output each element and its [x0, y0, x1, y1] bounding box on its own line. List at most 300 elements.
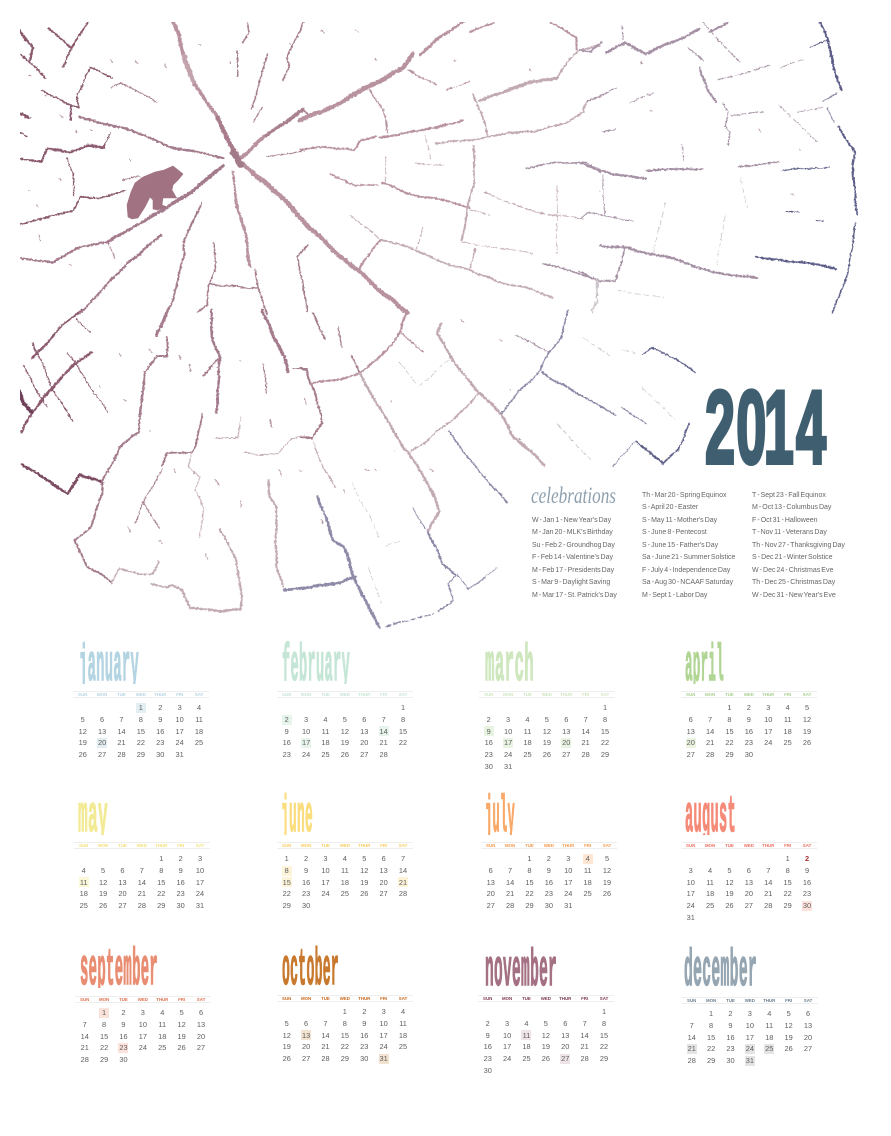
- day grid: 28: [117, 750, 126, 759]
- day grid: 22: [600, 1042, 608, 1051]
- day grid: 14: [117, 727, 126, 736]
- panel: may: [74, 791, 210, 910]
- weekday header: SAT: [600, 996, 608, 1001]
- day grid: 8: [343, 1019, 347, 1028]
- day grid: 24: [302, 750, 310, 759]
- day grid: 3: [198, 854, 202, 863]
- day grid: 25: [523, 750, 532, 759]
- day grid: 26: [803, 738, 811, 747]
- day grid: 9: [362, 1019, 366, 1028]
- day grid: 14: [321, 1031, 330, 1040]
- day grid: 6: [747, 866, 751, 875]
- day grid: 6: [806, 1009, 810, 1018]
- day grid: [484, 703, 609, 771]
- day grid: [79, 703, 203, 759]
- day grid: 9: [747, 715, 751, 724]
- day grid: 10: [764, 715, 772, 724]
- weekday header: TUE: [523, 692, 532, 697]
- day grid: 15: [137, 727, 145, 736]
- day grid: 4: [708, 866, 712, 875]
- day grid: 6: [304, 1019, 308, 1028]
- weekday header: FRI: [380, 692, 387, 697]
- day grid: 21: [688, 1044, 696, 1053]
- day grid: 20: [687, 738, 695, 747]
- day grid: 2: [805, 854, 809, 863]
- day grid: [283, 1007, 407, 1064]
- day grid: 20: [745, 889, 753, 898]
- weekday header: TUE: [725, 692, 734, 697]
- weekday header: THUR: [358, 692, 370, 697]
- day grid: 3: [323, 854, 328, 863]
- day grid: 29: [600, 1054, 608, 1063]
- day grid: 22: [707, 1044, 715, 1053]
- day grid: 30: [726, 1056, 735, 1065]
- weekday header: [277, 995, 413, 1002]
- day grid: 4: [323, 715, 328, 724]
- celebrations list: column three: Th - Dec 25 - Christmas Day: [752, 579, 835, 586]
- day grid: 30: [177, 901, 185, 910]
- day grid: 21: [581, 1042, 589, 1051]
- day grid: 6: [120, 866, 125, 875]
- weekday header: THUR: [358, 996, 370, 1001]
- day grid: 30: [545, 901, 553, 910]
- celebrations list: column three: T - Sept 23 - Fall Equinox: [752, 492, 826, 499]
- weekday header: SAT: [399, 996, 407, 1001]
- day grid: 3: [505, 1019, 509, 1028]
- day grid: 26: [341, 750, 349, 759]
- day grid: 2: [179, 854, 183, 863]
- weekday header: SAT: [399, 692, 407, 697]
- day grid: 13: [197, 1020, 205, 1029]
- weekday header: SAT: [803, 843, 811, 848]
- day grid: 14: [581, 1031, 589, 1040]
- weekday header: FRI: [380, 996, 387, 1001]
- day grid: 31: [746, 1056, 754, 1065]
- weekday header: WED: [340, 692, 350, 697]
- day grid: 24: [746, 1044, 754, 1053]
- day grid: 11: [322, 727, 329, 736]
- celebrations list: column two: S - May 11 - Mother's Day: [642, 517, 717, 524]
- celebrations list: column three: T - Nov 11 - Veterans Day: [752, 529, 827, 536]
- day grid: 2: [121, 1008, 126, 1017]
- year: 2014: 2014: [705, 369, 826, 486]
- day grid: [282, 703, 407, 759]
- day grid: 13: [562, 727, 570, 736]
- day grid: 27: [302, 1054, 310, 1063]
- day grid: 4: [767, 1009, 771, 1018]
- weekday header: [277, 842, 413, 849]
- weekday header: FRI: [784, 843, 791, 848]
- day grid: 7: [690, 1021, 694, 1030]
- day grid: 8: [527, 866, 532, 875]
- day grid: 20: [562, 738, 570, 747]
- day grid: 13: [118, 878, 127, 887]
- day grid: 22: [784, 889, 792, 898]
- day grid: 17: [139, 1032, 147, 1041]
- day grid: 7: [766, 866, 770, 875]
- weekday header: THUR: [156, 997, 168, 1002]
- day grid: 9: [728, 1021, 733, 1030]
- panel: april: [681, 640, 817, 759]
- day grid: 17: [503, 1042, 511, 1051]
- day grid: 3: [748, 1009, 752, 1018]
- weekday header: SAT: [803, 692, 811, 697]
- day grid: [687, 1009, 812, 1066]
- weekday header: WED: [744, 692, 754, 697]
- day grid: 16: [119, 1032, 128, 1041]
- weekday header: MON: [705, 692, 715, 697]
- day grid: 3: [566, 854, 570, 863]
- day grid: 7: [119, 715, 124, 724]
- day grid: 27: [687, 750, 695, 759]
- celebrations list: column three: M - Oct 13 - Columbus Day: [752, 504, 831, 511]
- day grid: 23: [360, 1042, 368, 1051]
- day grid: 27: [197, 1043, 205, 1052]
- day grid: 25: [341, 889, 349, 898]
- day grid: 1: [401, 703, 405, 712]
- day grid: 17: [764, 727, 772, 736]
- day grid: 24: [564, 889, 572, 898]
- day grid: 25: [765, 1044, 773, 1053]
- day grid: 16: [485, 738, 493, 747]
- day grid: 13: [302, 1031, 310, 1040]
- day grid: 7: [323, 1019, 328, 1028]
- celebrations list: column two: F - July 4 - Independence Day: [642, 567, 730, 574]
- day grid: 5: [101, 866, 105, 875]
- day grid: 5: [285, 1019, 289, 1028]
- day grid: 16: [484, 1042, 492, 1051]
- day grid: 2: [304, 854, 308, 863]
- weekday header: TUE: [119, 997, 128, 1002]
- day grid: 24: [764, 738, 772, 747]
- day grid: 16: [803, 878, 811, 887]
- day grid: 18: [522, 1042, 531, 1051]
- day grid: 10: [503, 1031, 511, 1040]
- weekday header: THUR: [763, 998, 775, 1003]
- day grid: [484, 1007, 608, 1075]
- weekday header: WED: [340, 996, 350, 1001]
- day grid: 8: [139, 715, 143, 724]
- celebrations list: column one: F - Feb 14 - Valentine's Day: [532, 554, 613, 561]
- day grid: 20: [804, 1033, 812, 1042]
- day grid: 21: [117, 738, 126, 747]
- day grid: 16: [302, 878, 310, 887]
- weekday header: MON: [502, 996, 512, 1001]
- day grid: 21: [380, 738, 388, 747]
- weekday header: THUR: [560, 692, 572, 697]
- day grid: 9: [487, 727, 491, 736]
- day grid: 18: [195, 727, 203, 736]
- day grid: 11: [765, 1021, 773, 1030]
- day grid: 19: [603, 878, 611, 887]
- day grid: 2: [486, 1019, 490, 1028]
- cracks: radial and ring lines: [20, 22, 857, 627]
- day grid: 16: [177, 878, 185, 887]
- day grid: 26: [785, 1044, 793, 1053]
- day grid: 15: [525, 878, 534, 887]
- day grid: 18: [341, 878, 349, 887]
- day grid: 9: [285, 727, 289, 736]
- day grid: 28: [138, 901, 146, 910]
- day grid: 23: [745, 738, 753, 747]
- day grid: 15: [725, 727, 734, 736]
- weekday header: MON: [505, 843, 515, 848]
- day grid: 28: [582, 750, 590, 759]
- celebrations list: column three: W - Dec 24 - Christmas Eve: [752, 567, 833, 574]
- celebrations list: column two: M - Sept 1 - Labor Day: [642, 592, 707, 599]
- weekday header: TUE: [725, 843, 734, 848]
- day grid: 21: [81, 1043, 89, 1052]
- day grid: 16: [545, 878, 553, 887]
- weekday header: [681, 842, 817, 849]
- day grid: 1: [603, 703, 607, 712]
- day grid: 7: [83, 1020, 87, 1029]
- day grid: 31: [504, 762, 512, 771]
- day grid: [81, 1008, 205, 1064]
- day grid: 25: [80, 901, 88, 910]
- day grid: 26: [283, 1054, 291, 1063]
- day grid: 10: [196, 866, 204, 875]
- day grid: 23: [119, 1043, 128, 1052]
- day grid: 5: [362, 854, 366, 863]
- weekday header: SAT: [601, 692, 609, 697]
- day grid: 3: [141, 1008, 145, 1017]
- celebrations list: column one: S - Mar 9 - Daylight Saving: [532, 579, 610, 586]
- weekday header: MON: [503, 692, 513, 697]
- day grid: 8: [603, 715, 607, 724]
- celebrations list: column three: [752, 492, 845, 599]
- day grid: 9: [805, 866, 809, 875]
- day grid: 20: [118, 889, 127, 898]
- weekday header: MON: [98, 843, 108, 848]
- day grid: 29: [100, 1055, 108, 1064]
- tree ring crack artwork with bear: [20, 22, 858, 629]
- day grid: 13: [380, 866, 388, 875]
- day grid: 10: [176, 715, 184, 724]
- day grid: 8: [786, 866, 790, 875]
- day grid: 21: [706, 738, 714, 747]
- day grid: 8: [102, 1020, 106, 1029]
- day grid: 3: [506, 715, 510, 724]
- weekday header: SAT: [804, 998, 812, 1003]
- day grid: 31: [380, 1054, 388, 1063]
- day grid: 16: [726, 1033, 735, 1042]
- day grid: 13: [561, 1031, 569, 1040]
- weekday header: THUR: [562, 843, 574, 848]
- panel: february: [277, 640, 413, 759]
- day grid: 30: [156, 750, 164, 759]
- day grid: 14: [706, 727, 714, 736]
- day grid: 12: [785, 1021, 793, 1030]
- weekday header: WED: [745, 998, 755, 1003]
- celebrations list: column one: M - Jan 20 - MLK's Birthday: [532, 529, 613, 536]
- day grid: 9: [304, 866, 308, 875]
- day grid: 2: [747, 703, 751, 712]
- day grid: 7: [508, 866, 512, 875]
- day grid: 20: [487, 889, 495, 898]
- weekday header: FRI: [784, 692, 791, 697]
- day grid: 5: [544, 1019, 548, 1028]
- day grid: 21: [321, 1042, 330, 1051]
- day grid: 14: [764, 878, 772, 887]
- celebrations list: column one: [532, 517, 617, 599]
- day grid: 18: [523, 738, 532, 747]
- day grid: 1: [159, 854, 163, 863]
- day grid: 21: [399, 878, 407, 887]
- day grid: 19: [542, 1042, 550, 1051]
- celebrations list: column two: Sa - Aug 30 - NCAAF Saturday: [642, 579, 733, 586]
- celebrations list: column one: Su - Feb 2 - Groundhog Day: [532, 542, 615, 549]
- day grid: 23: [485, 750, 493, 759]
- panel: july: [481, 791, 617, 910]
- day grid: 25: [522, 1054, 531, 1063]
- weekday header: FRI: [380, 843, 387, 848]
- day grid: 22: [341, 1042, 349, 1051]
- day grid: 13: [687, 727, 695, 736]
- day grid: 25: [584, 889, 592, 898]
- day grid: 2: [547, 854, 551, 863]
- day grid: 2: [728, 1009, 733, 1018]
- day grid: 30: [119, 1055, 128, 1064]
- day grid: 11: [399, 1019, 407, 1028]
- weekday header: [73, 691, 209, 698]
- panel: june: [277, 791, 413, 910]
- day grid: 5: [343, 715, 347, 724]
- weekday header: TUE: [321, 843, 330, 848]
- day grid: 15: [157, 878, 165, 887]
- day grid: 18: [321, 738, 330, 747]
- day grid: 5: [545, 715, 549, 724]
- weekday header: THUR: [358, 843, 370, 848]
- day grid: 29: [601, 750, 609, 759]
- day grid: [686, 854, 812, 922]
- weekday header: SUN: [686, 692, 695, 697]
- weekday header: TUE: [118, 843, 127, 848]
- day grid: 18: [784, 727, 792, 736]
- day grid: 12: [603, 866, 611, 875]
- day grid: 5: [805, 703, 809, 712]
- day grid: 4: [401, 1007, 405, 1016]
- day grid: 3: [689, 866, 693, 875]
- day grid: 22: [137, 738, 145, 747]
- day grid: 19: [725, 889, 734, 898]
- weekday header: MON: [301, 843, 311, 848]
- day grid: 11: [158, 1020, 166, 1029]
- celebrations list: column three: Th - Nov 27 - Thanksgiving Day: [752, 542, 845, 549]
- day grid: 4: [197, 703, 201, 712]
- weekday header: TUE: [726, 998, 735, 1003]
- weekday header: TUE: [525, 843, 534, 848]
- weekday header: FRI: [584, 843, 591, 848]
- panel: january: [73, 640, 209, 759]
- day grid: 8: [727, 715, 732, 724]
- day grid: 24: [687, 901, 695, 910]
- day grid: 26: [79, 750, 87, 759]
- day grid: 23: [156, 738, 164, 747]
- day grid: 23: [545, 889, 553, 898]
- day grid: 30: [803, 901, 811, 910]
- day grid: 19: [785, 1033, 793, 1042]
- day grid: 18: [765, 1033, 773, 1042]
- day grid: 10: [746, 1021, 754, 1030]
- weekday header: MON: [301, 996, 311, 1001]
- weekday header: THUR: [762, 692, 774, 697]
- weekday header: WED: [137, 843, 147, 848]
- weekday header: [478, 995, 614, 1002]
- day grid: 6: [199, 1008, 203, 1017]
- weekday header: SUN: [282, 996, 291, 1001]
- day grid: 19: [178, 1032, 186, 1041]
- day grid: [282, 854, 408, 910]
- weekday header: SUN: [687, 998, 696, 1003]
- day grid: 25: [158, 1043, 166, 1052]
- celebrations list: column three: S - Dec 21 - Winter Solstice: [752, 554, 833, 561]
- weekday header: [277, 691, 413, 698]
- day grid: 22: [100, 1043, 108, 1052]
- day grid: 7: [708, 715, 712, 724]
- day grid: 31: [564, 901, 572, 910]
- day grid: 7: [583, 1019, 587, 1028]
- day grid: 26: [178, 1043, 186, 1052]
- day grid: 12: [542, 1031, 550, 1040]
- day grid: 19: [283, 1042, 291, 1051]
- day grid: 12: [283, 1031, 291, 1040]
- day grid: 27: [562, 750, 570, 759]
- weekday header: THUR: [154, 692, 166, 697]
- celebrations list: column two: S - April 20 - Easter: [642, 504, 698, 511]
- panel: december: [682, 946, 818, 1066]
- day grid: 15: [707, 1033, 715, 1042]
- day grid: 7: [382, 715, 386, 724]
- day grid: 22: [725, 738, 734, 747]
- day grid: 31: [176, 750, 184, 759]
- weekday header: [74, 842, 210, 849]
- day grid: 11: [524, 727, 531, 736]
- weekday header: [479, 691, 615, 698]
- celebrations list: column two: S - June 8 - Pentecost: [642, 529, 707, 536]
- day grid: 28: [506, 901, 514, 910]
- celebrations list: column one: M - Mar 17 - St. Patrick's Day: [532, 592, 617, 599]
- day grid: 23: [726, 1044, 735, 1053]
- day grid: 3: [766, 703, 770, 712]
- day grid: 2: [285, 715, 289, 724]
- day grid: 6: [100, 715, 104, 724]
- panel: march: [479, 640, 615, 771]
- weekday header: [75, 996, 211, 1003]
- weekday header: SUN: [483, 996, 492, 1001]
- celebrations list: column one: M - Feb 17 - Presidents Day: [532, 567, 614, 574]
- day grid: 1: [727, 703, 732, 712]
- day grid: 7: [140, 866, 144, 875]
- day grid: [487, 854, 611, 910]
- day grid: 1: [709, 1009, 713, 1018]
- day grid: 26: [99, 901, 107, 910]
- day grid: 23: [484, 1054, 492, 1063]
- day grid: 6: [489, 866, 493, 875]
- day grid: 11: [80, 878, 88, 887]
- day grid: 8: [159, 866, 163, 875]
- day grid: 26: [603, 889, 611, 898]
- day grid: 16: [156, 727, 164, 736]
- day grid: 28: [399, 889, 407, 898]
- day grid: 26: [725, 901, 734, 910]
- day grid: 29: [283, 901, 291, 910]
- day grid: 29: [157, 901, 165, 910]
- weekday header: WED: [136, 692, 146, 697]
- day grid: 10: [380, 1019, 388, 1028]
- weekday header: THUR: [762, 843, 774, 848]
- day grid: 6: [563, 1019, 567, 1028]
